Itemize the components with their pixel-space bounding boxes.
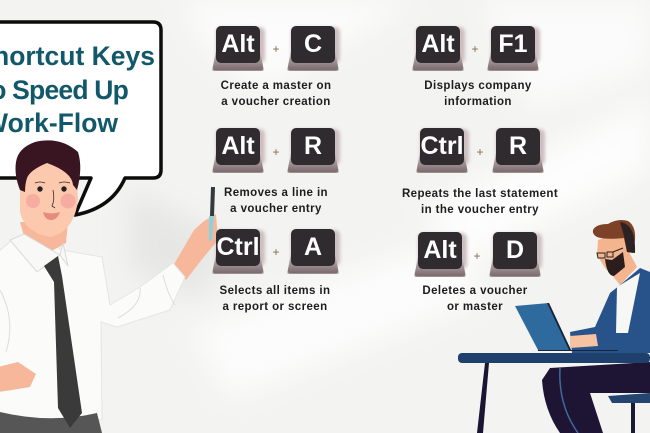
caption: information [444,96,512,108]
caption: a voucher creation [221,96,331,108]
text: Ctrl [420,132,464,160]
lower hand [0,362,36,392]
laptop [515,303,571,350]
text: R [509,132,527,160]
caption: a voucher entry [230,202,322,214]
caption: or master [447,300,503,312]
text: D [506,236,524,264]
caption [221,80,331,108]
text: + [272,145,280,159]
leg stripe [560,368,578,433]
trousers [0,412,102,433]
text: + [473,249,480,263]
hair [593,220,635,253]
hands [570,334,598,348]
beard [605,252,625,276]
key pair: Ctrl + A [212,228,342,274]
arm and hand [173,214,218,280]
cheeks [26,194,40,208]
key pair: Ctrl + R [416,128,546,173]
text: + [272,245,280,259]
text: Ctrl [216,233,260,261]
text: Alt [421,30,455,58]
caption [424,80,532,108]
caption [224,187,328,214]
hair [16,140,80,192]
collar [10,234,68,272]
caption: Repeats the last statement [402,188,558,200]
key pair: Alt + F1 [412,25,542,71]
caption [402,188,558,216]
caption: in the voucher entry [421,204,539,216]
text: Alt [423,236,457,264]
key pair: Alt + C [212,25,342,71]
hair back [620,222,635,253]
pen [210,187,215,216]
text: Alt [221,30,255,58]
caption: Create a master on [221,80,331,92]
jacket [570,268,650,353]
tie [44,256,82,428]
caption [220,285,330,312]
key pair: Alt + D [414,231,544,277]
text: C [304,30,322,58]
table [458,353,650,363]
text: + [471,42,478,56]
chair [608,393,650,403]
title [0,41,155,138]
caption: Removes a line in [224,187,328,199]
text: A [304,233,322,261]
caption: Displays company [424,80,532,92]
shirt [0,232,185,420]
caption: Selects all items in [220,285,330,297]
shirt [616,273,640,333]
neck [20,222,68,253]
caption: Deletes a voucher [422,285,528,297]
head [20,155,78,237]
caption: a report or screen [222,300,328,312]
text: F1 [498,30,528,58]
shirt folds [0,275,175,352]
table leg [477,363,489,433]
trousers [542,362,650,433]
eyes and brows [37,186,43,192]
key pair: Alt + R [212,128,342,173]
text: R [304,132,322,160]
neck and face [597,232,637,285]
caption [422,285,528,312]
mouth [43,212,60,220]
text: Alt [221,132,255,160]
text: + [272,42,280,56]
text: + [476,145,484,159]
glasses [597,248,623,258]
